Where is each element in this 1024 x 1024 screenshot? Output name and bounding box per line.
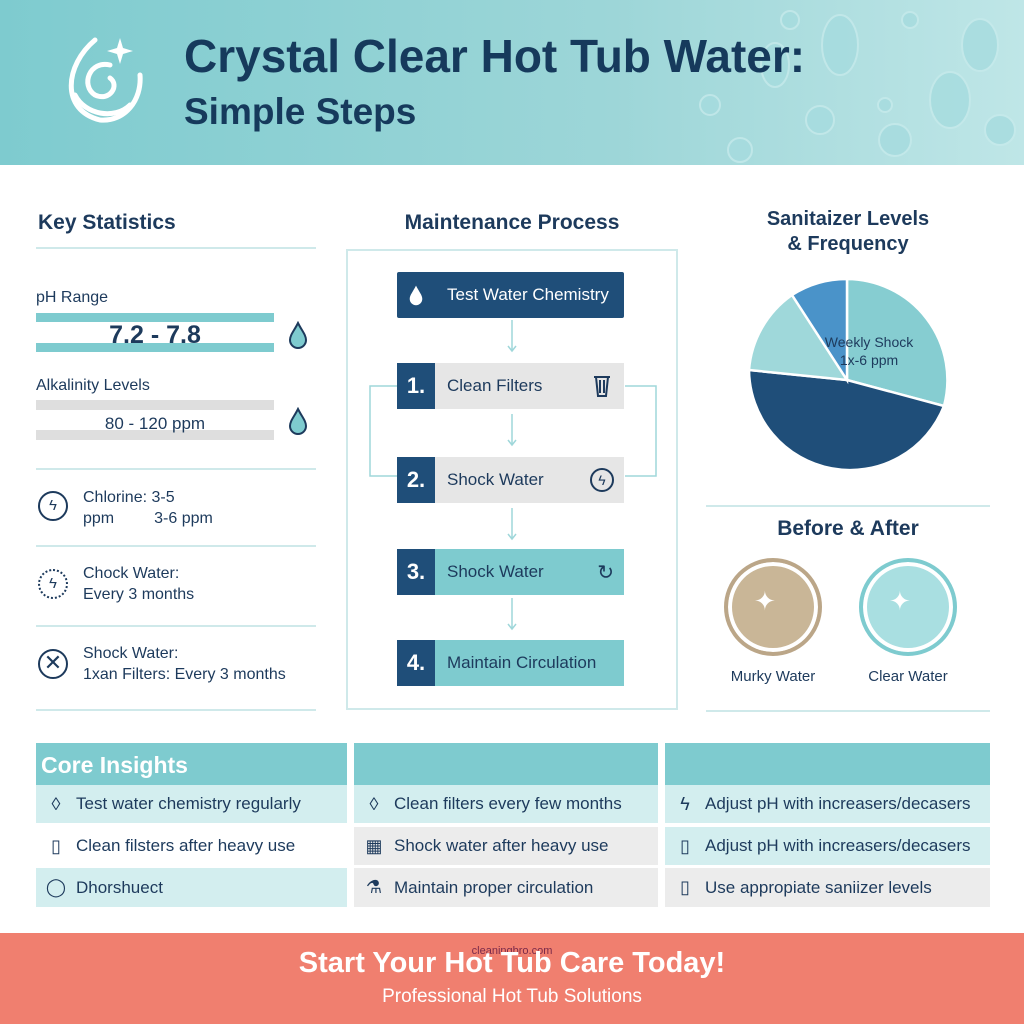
step 1: Clean Filters <box>447 376 542 395</box>
title: Simple Steps <box>184 91 416 132</box>
panel: core insights: Adjust pH with increasers/decasers <box>705 836 971 855</box>
title <box>184 30 805 132</box>
panel: core insights: Use appropiate saniizer levels <box>705 878 932 896</box>
chock water: Chock Water: <box>83 565 179 582</box>
panel: core insights: Shock water after heavy use <box>394 836 609 855</box>
footer banner: cleaningbro.com <box>472 945 552 957</box>
panel: core insights: Clean filsters after heavy use <box>76 836 295 855</box>
step 2: 2. <box>407 467 425 492</box>
chlorine: ppm 3-6 ppm <box>83 510 213 527</box>
insight rows: ◊ <box>52 794 60 814</box>
heading: Maintenance Process <box>405 211 619 234</box>
panel: core insights: Maintain proper circulation <box>394 878 593 896</box>
panel: maintenance process <box>346 211 678 710</box>
heading: Before & After <box>777 517 919 540</box>
panel: core insights <box>36 743 990 907</box>
panel: before & after <box>724 517 957 685</box>
shock water filters: 1xan Filters: Every 3 months <box>83 666 286 683</box>
pie chart: Weekly Shock <box>825 334 914 350</box>
insight rows <box>36 785 347 823</box>
murky water: ✦ <box>754 586 776 616</box>
panel: key statistics <box>36 211 316 711</box>
panel: core insights: Dhorshuect <box>76 878 163 896</box>
clear water: Clear Water <box>868 668 948 685</box>
panel: core insights: ▯ <box>51 836 61 856</box>
alkalinity: Alkalinity Levels <box>36 377 150 394</box>
pH range: pH Range <box>36 289 108 306</box>
insight rows: Test water chemistry regularly <box>76 794 301 813</box>
step 2: ϟ <box>598 472 606 488</box>
step 2 <box>397 457 624 503</box>
step: test water chemistry: Test Water Chemistry <box>447 285 609 304</box>
panel: core insights: ▯ <box>680 877 690 897</box>
footer banner <box>0 933 1024 1024</box>
panel: core insights: Clean filters every few months <box>394 794 622 813</box>
footer banner: Start Your Hot Tub Care Today! <box>299 947 725 979</box>
panel: core insights: Adjust pH with increasers/decasers <box>705 794 971 813</box>
heading: & Frequency <box>787 233 909 255</box>
step 4 <box>397 640 624 686</box>
heading: Core Insights <box>41 752 188 778</box>
panel: core insights: ◯ <box>46 877 66 897</box>
alkalinity: 80 - 120 ppm <box>105 414 205 433</box>
footer banner: Professional Hot Tub Solutions <box>382 986 642 1007</box>
panel: core insights: ▯ <box>680 836 690 856</box>
pH range <box>36 289 307 352</box>
pie chart <box>750 280 946 469</box>
header <box>0 0 1024 165</box>
chock water <box>38 565 194 603</box>
chlorine <box>38 489 213 527</box>
decorative bubbles <box>699 10 1014 163</box>
panel: core insights: ◊ <box>370 794 378 814</box>
step 1: 1. <box>407 373 425 398</box>
shock water filters: Shock Water: <box>83 645 178 662</box>
step 4: 4. <box>407 650 425 675</box>
step 2: Shock Water <box>447 470 544 489</box>
step: test water chemistry <box>397 272 624 318</box>
murky water <box>724 558 822 685</box>
step 3: ↻ <box>597 562 614 584</box>
step 3: Shock Water <box>447 562 544 581</box>
panel: core insights: ▦ <box>365 836 382 856</box>
icon: swirl logo <box>68 38 143 123</box>
heading: Sanitaizer Levels <box>767 208 929 230</box>
flow connectors <box>369 320 657 630</box>
clear water <box>859 558 957 685</box>
pH range: 7.2 - 7.8 <box>109 321 201 349</box>
heading <box>767 208 929 255</box>
panel: sanitizer levels <box>750 208 946 469</box>
alkalinity <box>36 377 307 440</box>
pie chart: 1x-6 ppm <box>840 352 898 368</box>
step 1 <box>397 363 624 409</box>
clear water: ✦ <box>889 586 911 616</box>
panel: core insights: ϟ <box>680 794 690 814</box>
shock water filters: ✕ <box>44 650 62 675</box>
step 4: Maintain Circulation <box>447 653 596 672</box>
shock water filters <box>38 645 286 683</box>
chock water: ϟ <box>49 575 57 592</box>
chock water: Every 3 months <box>83 586 194 603</box>
chlorine: ϟ <box>49 497 57 514</box>
murky water: Murky Water <box>731 668 815 685</box>
title: Crystal Clear Hot Tub Water: <box>184 30 805 82</box>
heading <box>36 743 347 785</box>
heading: Key Statistics <box>38 211 176 234</box>
panel: core insights: ⚗ <box>366 877 382 897</box>
chlorine: Chlorine: 3-5 <box>83 489 175 506</box>
step 3 <box>397 549 624 595</box>
step 3: 3. <box>407 559 425 584</box>
